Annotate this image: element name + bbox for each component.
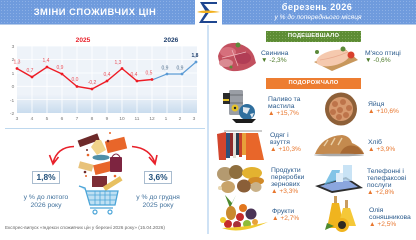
item: telecom — [367, 168, 406, 196]
callout text: to December: 2025 року — [142, 202, 174, 209]
item: sunflower oil: ▲ +2,5% — [369, 221, 396, 228]
item: fuel: ▲ +15,7% — [268, 110, 299, 117]
item: poultry: М'ясо птиці — [365, 50, 401, 57]
chart x axis labels: 4 — [31, 116, 34, 122]
item: grain products: переробки — [271, 174, 304, 181]
chart x axis labels: 7 — [76, 116, 79, 122]
chart x axis labels: 8 — [91, 116, 94, 122]
callout: month over month: 1,8% — [36, 172, 56, 182]
chart x axis labels: 1 — [165, 116, 168, 122]
line chart: 0,9 — [57, 65, 64, 71]
line chart — [10, 37, 199, 117]
icon: grains — [217, 165, 264, 193]
chart x axis labels: 3 — [16, 116, 19, 122]
item: pork: Свинина — [261, 50, 288, 57]
panel divider strip — [207, 25, 209, 234]
arrow: right — [132, 146, 158, 166]
chart x axis labels: 5 — [46, 116, 49, 122]
item: eggs — [368, 101, 399, 115]
chart x axis labels: 6 — [61, 116, 64, 122]
line chart: 1,3 — [115, 60, 122, 66]
item: grain products: Продукти — [271, 167, 301, 174]
item: bread: Хліб — [368, 139, 382, 146]
item: sunflower oil: Олія — [369, 207, 383, 214]
item: clothes: ▲ +10,3% — [270, 146, 301, 153]
chart x axis labels: 12 — [149, 116, 155, 122]
item: grain products: зернових — [271, 181, 300, 188]
line chart: 2025 — [76, 37, 91, 44]
item: sunflower oil: соняшникова — [369, 214, 411, 221]
item: fuel: мастила — [268, 103, 295, 110]
chart x axis labels: 11 — [135, 116, 140, 122]
line chart: 0,9 — [162, 66, 169, 72]
line chart: 1,4 — [43, 58, 50, 64]
item: eggs: Яйця — [368, 101, 384, 108]
item: clothes: взуття — [270, 139, 290, 146]
item: poultry — [365, 50, 401, 64]
chart x axis labels: 10 — [119, 116, 125, 122]
item: poultry: ▼ -0,6% — [365, 57, 391, 64]
icon: poultry — [314, 46, 358, 71]
line chart: 0,0 — [72, 77, 79, 83]
line chart: 3 — [12, 44, 15, 50]
banner: cheaper — [266, 31, 361, 42]
line chart: 0,4 — [104, 72, 111, 78]
item: bread: ▲ +3,9% — [368, 146, 395, 153]
banner: cheaper: ПОДЕШЕВШАЛО — [288, 33, 339, 39]
date heading: березень 2026 — [282, 2, 352, 12]
line chart: 1 — [12, 71, 15, 77]
icon: sunflower oil — [325, 196, 356, 232]
item: clothes — [270, 132, 301, 153]
item: telecom: ▲ +2,8% — [367, 189, 394, 196]
subtitle: у % до попереднього місяця — [274, 14, 362, 21]
callout: since December — [144, 171, 172, 184]
item: clothes: Одяг і — [270, 132, 289, 139]
icon: fruits — [220, 195, 268, 230]
callout text: to February — [24, 194, 68, 209]
item: eggs: ▲ +10,6% — [368, 108, 399, 115]
chart x axis labels — [5, 116, 205, 129]
item: fruits — [272, 208, 299, 222]
line chart: 2 — [12, 57, 15, 63]
item: pork — [261, 50, 288, 64]
item: fuel: Паливо та — [268, 96, 300, 103]
chart x axis labels: 3 — [193, 116, 196, 122]
item: fuel — [268, 96, 300, 117]
icon: pork — [218, 42, 256, 71]
icon: bread — [314, 135, 364, 156]
title: ЗМІНИ СПОЖИВЧИХ ЦІН — [34, 6, 156, 17]
item: fruits: ▲ +2,7% — [272, 215, 299, 222]
item: telecom: телефаксові — [367, 175, 406, 182]
line chart: 0 — [12, 84, 15, 90]
callout text: to February: у % до лютого — [24, 194, 68, 201]
callout text: to December: у % до грудня — [136, 194, 180, 201]
line chart: 0,7 — [27, 68, 34, 74]
line chart: 1,8 — [192, 53, 199, 59]
item: telecom: Телефонні і — [367, 168, 404, 175]
line chart: 1,3 — [14, 60, 21, 66]
line chart: -1 — [10, 98, 14, 104]
item: grain products — [271, 167, 304, 195]
banner: dearer — [266, 78, 361, 89]
line chart: 0,5 — [146, 70, 153, 76]
line chart: -0,2 — [88, 80, 97, 86]
line chart: 2026 — [164, 37, 179, 44]
icon: eggs — [325, 92, 357, 126]
line chart: 0,4 — [131, 72, 138, 78]
item: fruits: Фрукти — [272, 208, 294, 215]
callout text: to February: 2026 року — [30, 202, 62, 209]
callout: month over month — [32, 171, 60, 184]
line chart: -2 — [10, 111, 14, 117]
item: grain products: ▲ +3,3% — [271, 188, 298, 195]
arrow: left — [48, 146, 74, 166]
item: sunflower oil — [369, 207, 411, 228]
chart x axis labels: 2 — [179, 116, 182, 122]
chart x axis labels: 9 — [106, 116, 109, 122]
line chart: 0,9 — [177, 66, 184, 72]
callout text: to December — [136, 194, 180, 209]
item: bread — [368, 139, 395, 153]
icon: shopping cart with goods — [78, 132, 128, 215]
icon: smartphone — [315, 165, 363, 193]
header band — [0, 0, 416, 25]
icon: clothes rack — [217, 131, 264, 160]
banner: dearer: ПОДОРОЖЧАЛО — [289, 80, 338, 86]
source note: Експрес-випуск «Індекси споживчих цін у березні 2026 року» (15.04.2026) — [5, 225, 165, 230]
icon: fuel barrel and globe — [223, 90, 256, 123]
item: pork: ▼ -2,3% — [261, 57, 287, 64]
logo: sigma — [195, 0, 222, 25]
item: telecom: послуги — [367, 182, 392, 189]
product icons — [217, 42, 364, 232]
callout: since December: 3,6% — [148, 172, 168, 182]
